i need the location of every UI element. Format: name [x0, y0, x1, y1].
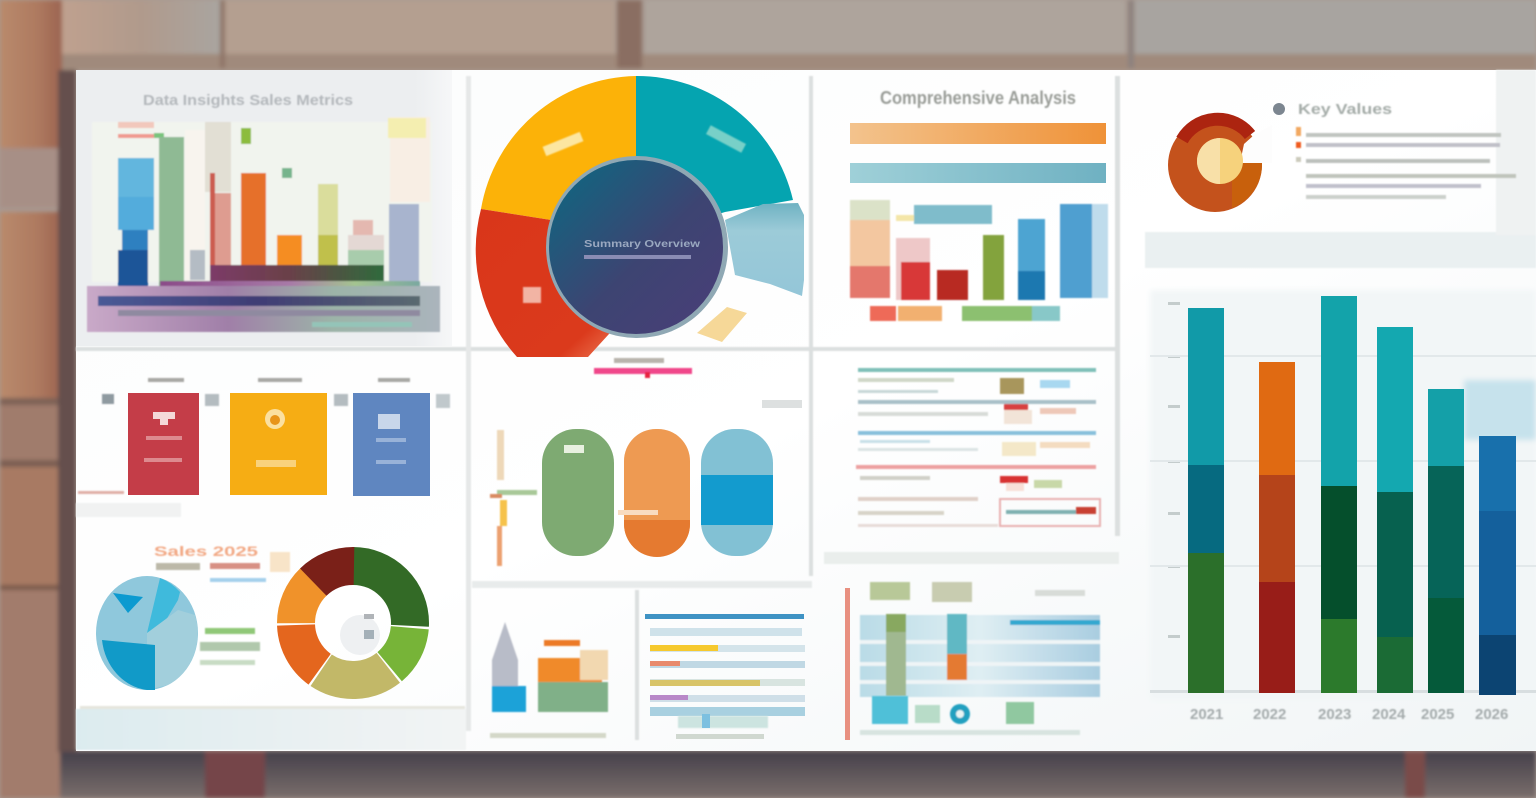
circle title: Summary Overview [584, 239, 700, 250]
card: yellow [230, 393, 327, 495]
capsule: blue [701, 429, 773, 556]
panel: three capsules [490, 400, 802, 566]
panel: bottom-right small table [845, 582, 1100, 740]
x axis labels: 2026 [1475, 706, 1508, 723]
red donut [1168, 118, 1272, 212]
heading: top-left chart: Data Insights Sales Metrics [143, 92, 353, 109]
panel: large stacked bar chart [1150, 290, 1536, 723]
x axis labels: 2023 [1318, 706, 1351, 723]
bar 5 [1428, 389, 1464, 693]
panel: small charts bottom centre [490, 614, 805, 739]
pie legend [200, 628, 260, 665]
card: red [128, 393, 199, 495]
chart backdrop [1150, 290, 1536, 700]
mini bar chart [850, 200, 1108, 300]
table rows [860, 614, 1100, 697]
icon: small circle [1273, 103, 1285, 115]
table icons [860, 696, 1080, 735]
left axis labels [490, 430, 537, 566]
central circle [546, 156, 728, 338]
x axis labels: 2024 [1372, 706, 1406, 723]
caption under ring [594, 358, 692, 378]
bar 1 [1188, 308, 1224, 693]
ring segment: yellow [481, 76, 636, 240]
axis ticks [1150, 302, 1536, 693]
note lines [1296, 127, 1516, 199]
donut centre mark [340, 614, 380, 655]
x axis labels: 2025 [1421, 706, 1454, 723]
x axis labels [1190, 706, 1508, 723]
small stacked chart [490, 622, 608, 738]
heading: top-middle chart: Comprehensive Analysis [880, 88, 1076, 108]
ring segment: red [476, 209, 640, 357]
bar 6 [1479, 436, 1516, 695]
horizontal banner bars [850, 123, 1106, 183]
ring segment: teal [636, 76, 793, 240]
ring segment: pale yellow [697, 307, 747, 342]
donut chart [272, 542, 434, 704]
small label [762, 400, 802, 408]
bar 3 [1321, 296, 1357, 693]
panel: top-middle bars [850, 88, 1108, 321]
pie chart [96, 576, 198, 690]
bar 2 [1259, 362, 1295, 693]
ring segment: light blue [725, 203, 804, 296]
panel: middle table [856, 368, 1100, 527]
card labels [78, 378, 450, 494]
labels [154, 543, 290, 582]
labels: Sales 2025 [154, 543, 258, 559]
capsule: green [542, 429, 614, 556]
striped bars [645, 614, 805, 739]
panel: top-right donut note [1168, 101, 1516, 212]
panel: central ring chart [476, 76, 804, 378]
panel: three cards [78, 378, 450, 496]
heading: top-right: Key Values [1298, 101, 1392, 118]
ring labels [523, 125, 746, 303]
x axis labels: 2021 [1190, 706, 1223, 723]
mini chart legend [870, 306, 1060, 321]
table headers [870, 582, 1085, 602]
card: blue [353, 393, 430, 496]
x axis labels: 2022 [1253, 706, 1286, 723]
bar 4 [1377, 327, 1413, 693]
panel: bottom-left donut and pie [96, 542, 434, 704]
panel: top-left bar chart [76, 70, 452, 346]
capsule: orange [618, 429, 690, 557]
